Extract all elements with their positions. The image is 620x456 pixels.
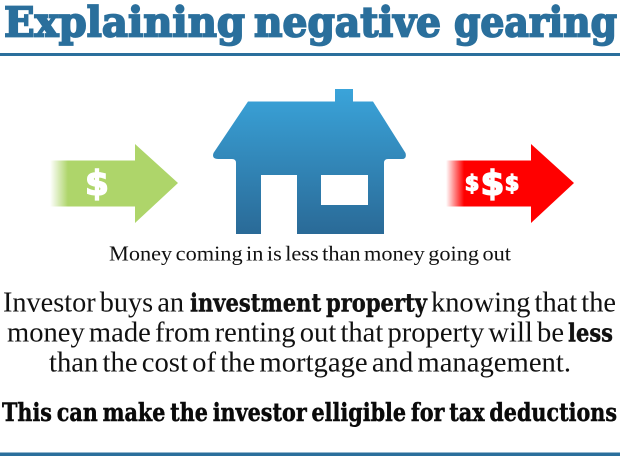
text block: explanation: knowing that the [431, 286, 616, 318]
bottom rule [0, 452, 620, 456]
arrow: money coming in [50, 144, 178, 223]
text block: explanation: investment property [190, 288, 428, 318]
icon: three dollar signs: $ [481, 164, 504, 204]
title [4, 0, 617, 46]
icon: house [213, 89, 406, 234]
icon: three dollar signs: $ [505, 172, 519, 196]
text block: explanation: less [568, 318, 613, 348]
text block: explanation [3, 286, 616, 378]
icon: three dollar signs: $ [465, 172, 479, 196]
arrow: money going out [446, 144, 574, 223]
text block: explanation: Investor buys an [3, 286, 184, 318]
text block: explanation: money made from renting out that property will be [7, 316, 564, 348]
icon: three dollar signs [465, 164, 519, 204]
icon: dollar sign: $ [85, 164, 109, 204]
text block: explanation: than the cost of the mortgage and management. [49, 346, 571, 378]
title rule [0, 53, 620, 56]
caption: Money coming in is less than money going out [109, 242, 511, 266]
